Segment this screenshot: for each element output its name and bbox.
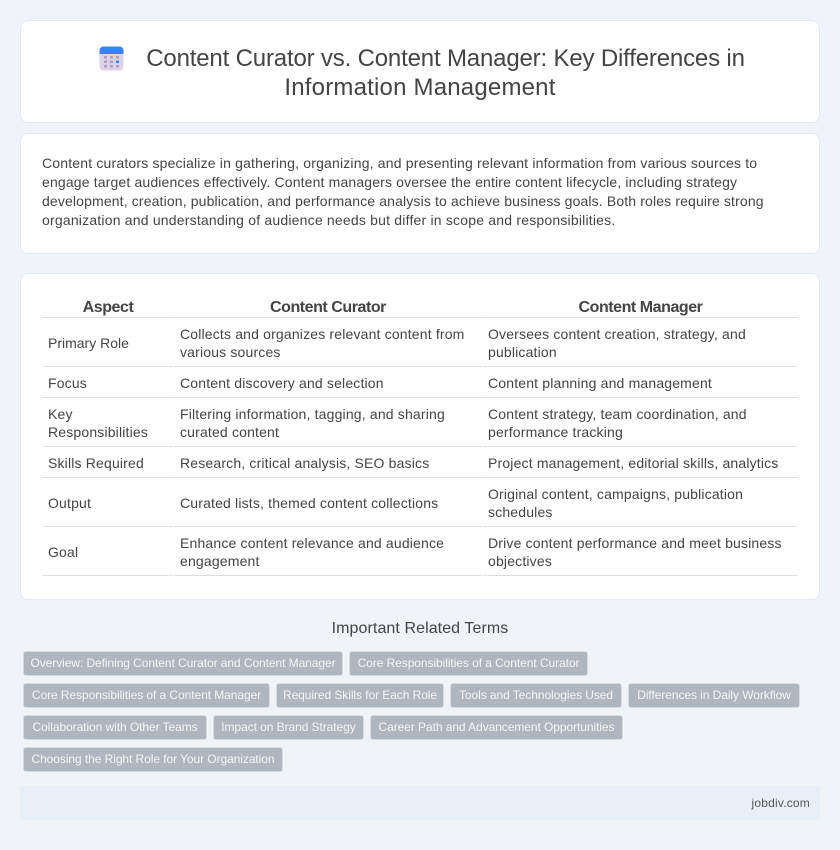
chip: Impact on Brand Strategy bbox=[221, 720, 356, 734]
chip: Differences in Daily Workflow bbox=[637, 688, 791, 702]
row: output: Output bbox=[48, 495, 91, 511]
row: output: schedules bbox=[488, 504, 553, 520]
row: primary role bbox=[48, 326, 746, 360]
row: key responsibilities: Key bbox=[48, 406, 73, 422]
row: primary role: Primary Role bbox=[48, 335, 129, 351]
chip bbox=[213, 715, 364, 740]
intro text panel: organization and understanding of audience needs but differ in scope and responsibilities. bbox=[42, 212, 615, 228]
chip: Tools and Technologies Used bbox=[459, 688, 613, 702]
row: goal: objectives bbox=[488, 553, 552, 569]
chip bbox=[370, 715, 623, 740]
intro text panel: engage target audiences effectively. Content managers oversee the entire content lifecycle, including strategy bbox=[42, 174, 737, 190]
row: primary role: publication bbox=[488, 344, 557, 360]
intro text panel: Content curators specialize in gathering, organizing, and presenting relevant information from various sources to bbox=[42, 155, 757, 171]
row: primary role: Oversees content creation, strategy, and bbox=[488, 326, 746, 342]
title: Content Curator vs. Content Manager: Key Differences in bbox=[146, 45, 745, 72]
table header: Content Curator bbox=[270, 299, 386, 316]
table header: Content Manager bbox=[579, 299, 702, 316]
row: skills required: Skills Required bbox=[48, 455, 144, 471]
table header bbox=[83, 299, 703, 316]
row: primary role: Collects and organizes relevant content from bbox=[180, 326, 465, 342]
row: key responsibilities: Responsibilities bbox=[48, 424, 148, 440]
chip: Career Path and Advancement Opportunities bbox=[379, 720, 614, 734]
chip bbox=[450, 683, 622, 708]
row: skills required bbox=[48, 455, 778, 471]
row: output: Curated lists, themed content collections bbox=[180, 495, 438, 511]
row: key responsibilities: Filtering information, tagging, and sharing bbox=[180, 406, 445, 422]
comparison table panel bbox=[20, 273, 820, 600]
chip bbox=[23, 651, 343, 676]
row: focus: Content discovery and selection bbox=[180, 375, 384, 391]
chip: Overview: Defining Content Curator and Content Manager bbox=[30, 656, 336, 670]
row: primary role: various sources bbox=[180, 344, 281, 360]
row: goal: Drive content performance and meet business bbox=[488, 535, 782, 551]
row: goal: Goal bbox=[48, 544, 78, 560]
chip bbox=[23, 747, 283, 772]
row: goal: Enhance content relevance and audience bbox=[180, 535, 444, 551]
table header: Aspect bbox=[83, 299, 133, 316]
row: goal bbox=[48, 535, 782, 569]
row: focus bbox=[48, 375, 712, 391]
row: skills required: Research, critical analysis, SEO basics bbox=[180, 455, 429, 471]
chip bbox=[276, 683, 444, 708]
chip: Choosing the Right Role for Your Organization bbox=[31, 752, 274, 766]
row: output: Original content, campaigns, publication bbox=[488, 486, 743, 502]
intro text panel: development, creation, publication, and performance analysis to achieve business goals. Both roles require strong bbox=[42, 193, 764, 209]
chip bbox=[628, 683, 800, 708]
related terms heading: Important Related Terms bbox=[332, 620, 508, 637]
row: output bbox=[48, 486, 743, 520]
row: key responsibilities: Content strategy, team coordination, and bbox=[488, 406, 747, 422]
intro text panel bbox=[20, 133, 820, 254]
row: goal: engagement bbox=[180, 553, 260, 569]
title: Information Management bbox=[284, 74, 556, 101]
chip bbox=[23, 683, 270, 708]
chip: Core Responsibilities of a Content Manager bbox=[32, 688, 261, 702]
chip: Core Responsibilities of a Content Curator bbox=[358, 656, 579, 670]
header card bbox=[20, 20, 820, 123]
row: key responsibilities: curated content bbox=[180, 424, 279, 440]
related terms chips bbox=[23, 651, 800, 772]
row: key responsibilities: performance tracking bbox=[488, 424, 623, 440]
footer bar bbox=[20, 786, 820, 820]
row: focus: Focus bbox=[48, 375, 87, 391]
chip: Required Skills for Each Role bbox=[283, 688, 437, 702]
chip bbox=[23, 715, 207, 740]
chip: Collaboration with Other Teams bbox=[32, 720, 198, 734]
footer source: jobdiv.com bbox=[752, 796, 810, 810]
title bbox=[146, 45, 745, 101]
row: focus: Content planning and management bbox=[488, 375, 712, 391]
row: skills required: Project management, editorial skills, analytics bbox=[488, 455, 778, 471]
row: key responsibilities bbox=[48, 406, 747, 440]
icon: calendar bbox=[100, 46, 124, 70]
chip bbox=[349, 651, 588, 676]
